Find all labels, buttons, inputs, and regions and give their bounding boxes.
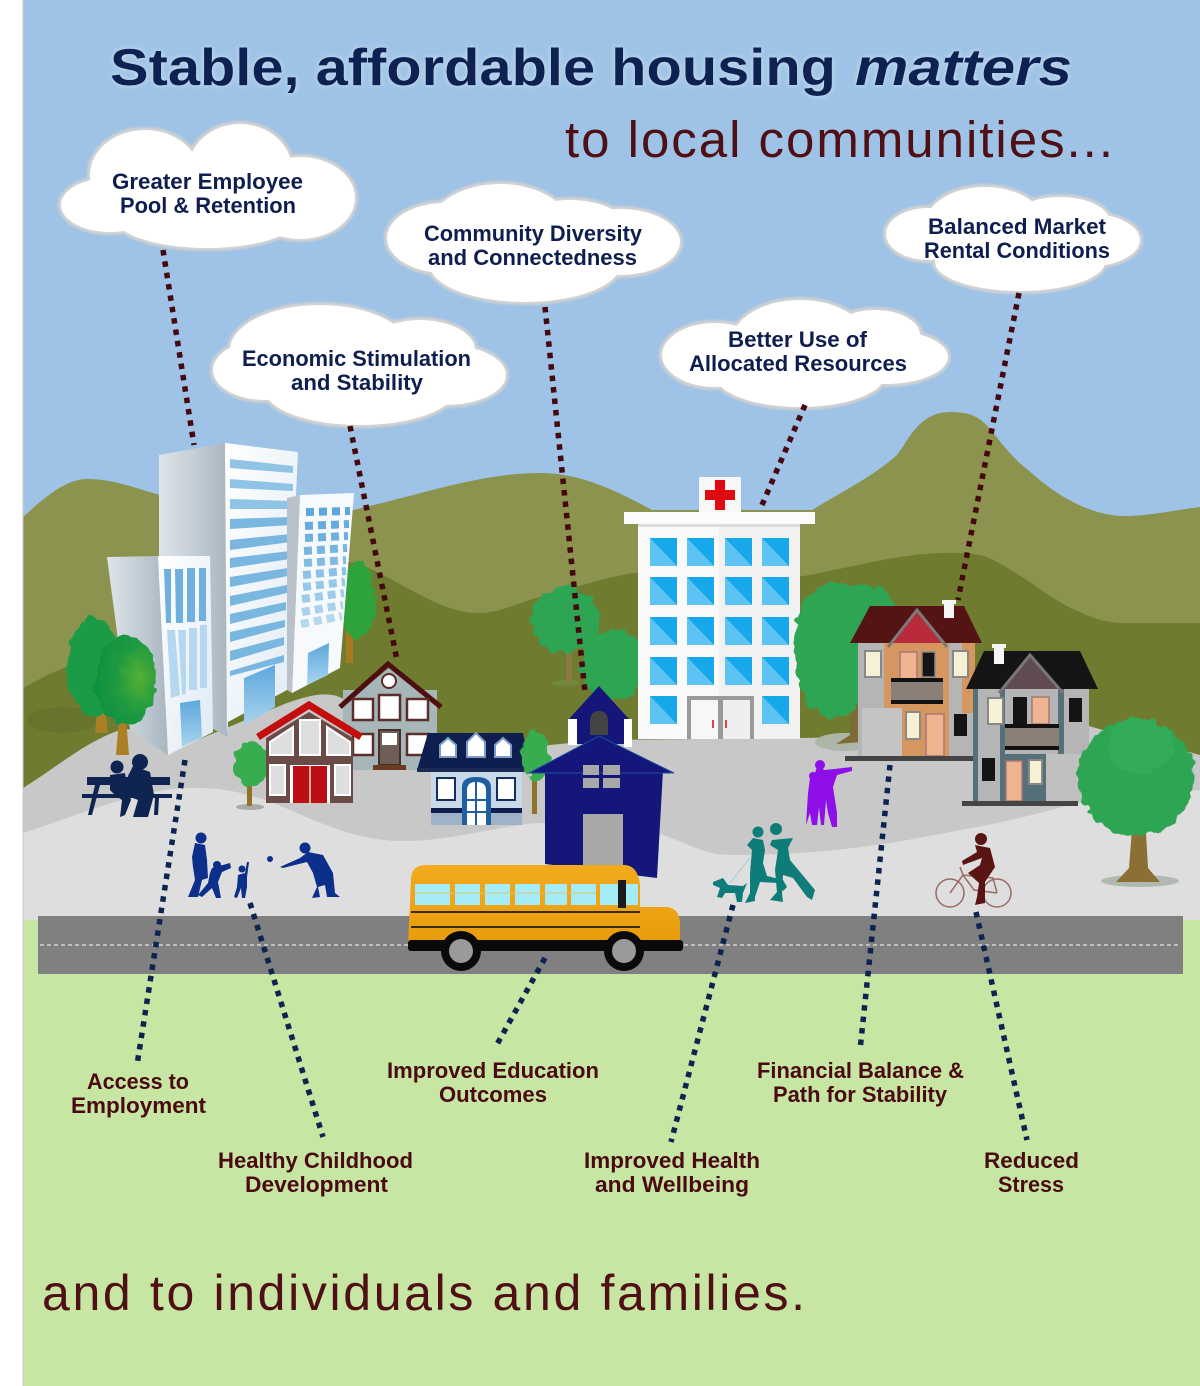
- cloud: Greater Employee Pool & Retention: [61, 124, 355, 248]
- title: matters: [855, 39, 1072, 97]
- cloud: Economic Stimulation and Stability: [213, 305, 506, 425]
- man playing ball silhouette: [267, 842, 340, 898]
- label: Improved Education Outcomes: Improved Education: [387, 1058, 599, 1083]
- red roof house: [233, 705, 361, 810]
- cloud: Economic Stimulation and Stability: Economic Stimulation: [242, 346, 471, 371]
- house: maroon roof: [845, 600, 982, 761]
- label: Improved Health and Wellbeing: Improved Health: [584, 1148, 760, 1173]
- label: Improved Education Outcomes: Outcomes: [439, 1082, 547, 1107]
- tree beside houses: [793, 582, 897, 751]
- light grey foreground: [23, 788, 1200, 925]
- cloud: Community Diversity and Connectedness: Community Diversity: [424, 221, 643, 246]
- road: [38, 916, 1183, 974]
- icon: red cross: [705, 480, 735, 510]
- grey ground mid layer: [23, 694, 1200, 930]
- school: [529, 686, 674, 878]
- cloud: Better Use of Allocated Resources: [662, 300, 948, 407]
- label: Reduced Stress: Reduced: [984, 1148, 1079, 1173]
- label: Access to Employment: [71, 1069, 207, 1118]
- label: Improved Education Outcomes: [387, 1058, 599, 1107]
- label: Reduced Stress: Stress: [998, 1172, 1064, 1197]
- front hills: [23, 553, 1200, 800]
- left edge rule: [22, 0, 24, 1386]
- label: Improved Health and Wellbeing: and Wellbeing: [595, 1172, 749, 1197]
- title: [110, 39, 1072, 97]
- joggers and dog silhouettes: [713, 823, 815, 903]
- label: Financial Balance & Path for Stability: [757, 1058, 964, 1107]
- maroon connector lines from clouds: [163, 250, 1019, 692]
- sky: [23, 0, 1200, 925]
- cyclist silhouette: [936, 833, 1011, 907]
- bench couple: [82, 754, 172, 817]
- label: Reduced Stress: [984, 1148, 1079, 1197]
- small tree right of blue house: [521, 731, 551, 814]
- house: black roof: [962, 644, 1098, 806]
- cloud: Balanced Market Rental Conditions: [886, 187, 1140, 291]
- mother and children silhouettes: [188, 832, 249, 898]
- cloud: Community Diversity and Connectedness: and Connectedness: [428, 245, 637, 270]
- cloud: Balanced Market Rental Conditions: Balanced Market: [928, 214, 1107, 239]
- label: Healthy Childhood Development: [218, 1148, 413, 1197]
- trees behind school: [531, 587, 646, 710]
- large tree right: [1078, 717, 1194, 887]
- office towers: [107, 443, 354, 755]
- blue house: [417, 733, 530, 825]
- school bus: [408, 865, 683, 971]
- cloud: Greater Employee Pool & Retention: Greater Employee: [112, 169, 303, 194]
- purple family silhouette: [806, 760, 852, 827]
- cloud: Economic Stimulation and Stability: and Stability: [291, 370, 424, 395]
- tree behind office towers: [338, 562, 376, 663]
- title: Stable, affordable housing: [110, 39, 836, 97]
- label: Healthy Childhood Development: Healthy Childhood: [218, 1148, 413, 1173]
- subtitle: to local communities...: [565, 111, 1113, 168]
- green lawn: [23, 920, 1200, 1386]
- hospital: [624, 477, 815, 739]
- closing statement: and to individuals and families.: [42, 1265, 805, 1321]
- label: Financial Balance & Path for Stability: Financial Balance &: [757, 1058, 964, 1083]
- navy connector lines to outcomes: [137, 760, 1027, 1142]
- barn house: [340, 664, 441, 770]
- cloud: Better Use of Allocated Resources: Better Use of: [728, 327, 868, 352]
- label: Healthy Childhood Development: Development: [245, 1172, 389, 1197]
- label: Access to Employment: Access to: [87, 1069, 189, 1094]
- label: Improved Health and Wellbeing: [584, 1148, 760, 1197]
- cloud: Greater Employee Pool & Retention: Pool & Retention: [120, 193, 296, 218]
- back hills: [23, 412, 1200, 800]
- cloud: Balanced Market Rental Conditions: Rental Conditions: [924, 238, 1110, 263]
- cloud: Community Diversity and Connectedness: [387, 184, 680, 302]
- trees left of towers: [27, 617, 156, 755]
- label: Access to Employment: Employment: [71, 1093, 207, 1118]
- cloud: Better Use of Allocated Resources: Allocated Resources: [689, 351, 907, 376]
- label: Financial Balance & Path for Stability: Path for Stability: [773, 1082, 948, 1107]
